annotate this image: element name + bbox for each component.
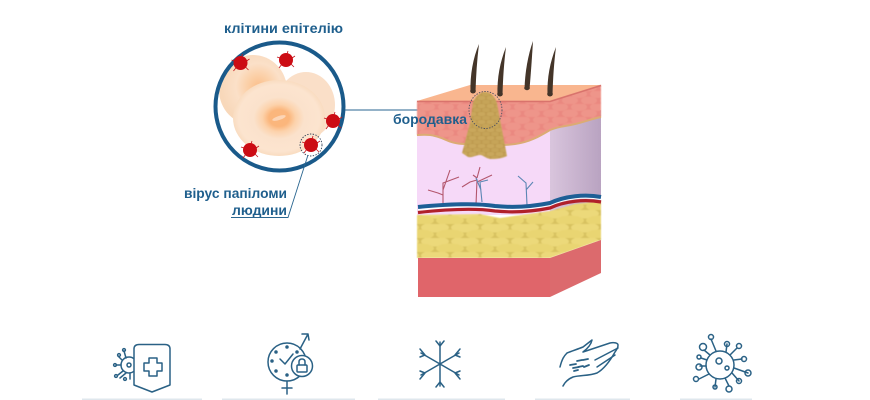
cell: back right [277, 72, 335, 138]
circle outline [216, 42, 344, 170]
virus particle [302, 136, 320, 153]
label: human papillomavirus [184, 155, 308, 218]
blood vessels: arteries [428, 167, 492, 207]
virus particle [232, 54, 250, 71]
epidermis layer [417, 85, 601, 146]
icon row [114, 334, 751, 394]
hairs [470, 41, 556, 96]
artery: red band [418, 201, 601, 212]
panel: epithelial cells magnified view [216, 42, 472, 170]
muscle side [550, 240, 601, 297]
skin cross-section block [417, 41, 601, 297]
dotted highlight around virus [300, 134, 322, 156]
blood vessels: veins [476, 176, 533, 205]
icon: hand with marks [560, 340, 618, 386]
icon: snowflake [420, 341, 460, 387]
icon: virus [694, 334, 751, 392]
muscle front [418, 258, 550, 297]
connector line from circle to wart [345, 109, 472, 111]
white vessel gap [418, 198, 601, 210]
epidermis lower edge [417, 117, 601, 146]
wart [462, 92, 507, 159]
label: human papillomavirus: людини [232, 202, 287, 218]
cell: front [233, 80, 325, 156]
heading: epithelial cells: клітини епітелію [224, 20, 343, 36]
vein: blue band [418, 196, 601, 207]
cell nucleus highlight [272, 114, 286, 122]
dotted outline on wart [469, 92, 502, 128]
clipped caption tops along bottom edge [82, 398, 752, 400]
dermis front [417, 125, 550, 215]
label: wart: бородавка [393, 111, 467, 127]
skin top surface [417, 85, 601, 101]
subcutaneous fat layer [417, 201, 601, 258]
virus particle [277, 51, 295, 68]
virus particle [241, 141, 259, 158]
dermis side [550, 110, 601, 215]
icon: virus with medical shield [114, 344, 170, 392]
epidermis top edge [417, 86, 601, 102]
label: human papillomavirus: вірус папіломи [184, 185, 287, 201]
icon: clock with lock and gender symbols [268, 334, 312, 394]
virus particle [324, 112, 342, 129]
cell: back left [219, 55, 287, 125]
